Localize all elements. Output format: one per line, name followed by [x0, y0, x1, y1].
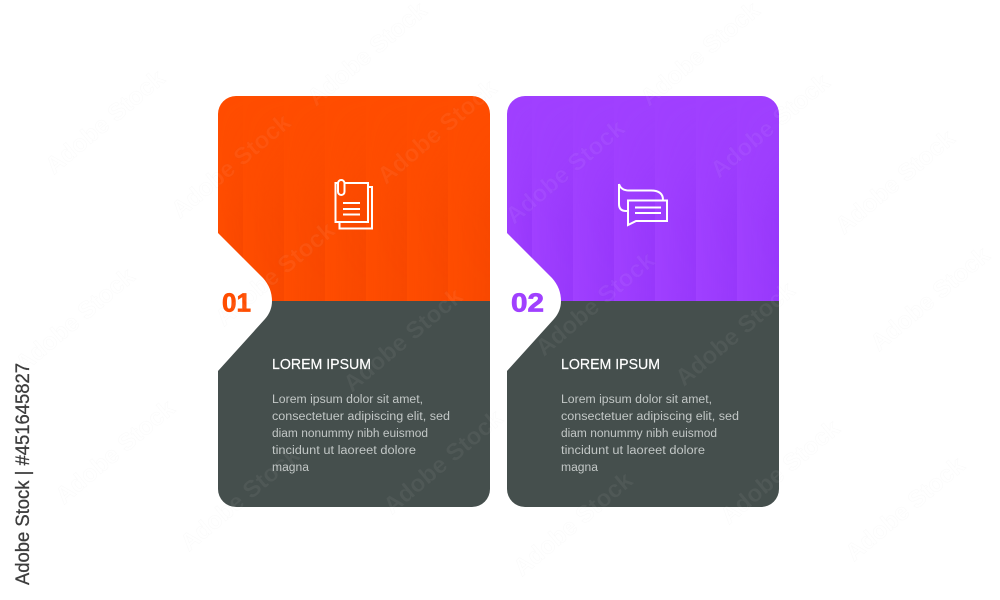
stock watermark pattern: Adobe Stock [210, 216, 341, 332]
stock watermark pattern: Adobe Stock [865, 241, 996, 357]
icon: speech bubbles [619, 184, 667, 225]
body text: consectetuer adipiscing elit, sed [561, 411, 739, 423]
stock watermark pattern: Adobe Stock [372, 74, 503, 190]
stock watermark pattern: Adobe Stock [830, 124, 961, 240]
heading: LOREM IPSUM [561, 357, 660, 373]
stock watermark pattern: Adobe Stock [530, 246, 661, 362]
stock watermark pattern: Adobe Stock [715, 414, 846, 530]
stock watermark pattern: Adobe Stock [338, 282, 469, 398]
orange top panel [218, 96, 490, 301]
panel: step 01 [218, 96, 490, 507]
dark bottom panel [218, 301, 490, 507]
stock watermark pattern: Adobe Stock [378, 404, 509, 520]
icon: documents with paperclip [336, 180, 372, 228]
stock watermark pattern: Adobe Stock [10, 262, 141, 378]
stock watermark pattern: Adobe Stock [302, 0, 433, 112]
stock watermark pattern: Adobe Stock [40, 64, 171, 180]
purple panel gradient stripes [518, 215, 779, 301]
orange panel gradient stripes [230, 245, 272, 298]
number 02: 02 [511, 288, 544, 318]
body text: Lorem ipsum dolor sit amet, [272, 394, 423, 406]
number 01: 01 [222, 288, 251, 318]
purple top panel [507, 96, 779, 301]
body text: Lorem ipsum dolor sit amet, [561, 394, 712, 406]
body text: consectetuer adipiscing elit, sed [272, 411, 450, 423]
heading: LOREM IPSUM [272, 357, 371, 373]
stock watermark pattern: Adobe Stock [175, 441, 306, 557]
stock watermark pattern: Adobe Stock [705, 68, 836, 184]
body text: diam nonummy nibh euismod [272, 428, 428, 440]
body text: magna [561, 462, 599, 474]
body text: diam nonummy nibh euismod [561, 428, 717, 440]
body text: tincidunt ut laoreet dolore [272, 445, 416, 457]
stock id caption: Adobe Stock | #451645827 [13, 363, 34, 585]
dark bottom panel [507, 301, 779, 507]
stock watermark pattern: Adobe Stock [166, 108, 297, 224]
body text: magna [272, 462, 310, 474]
stock watermark pattern: Adobe Stock [840, 451, 971, 567]
stock watermark pattern: Adobe Stock [635, 0, 766, 112]
body text [272, 394, 450, 474]
body text: tincidunt ut laoreet dolore [561, 445, 705, 457]
stock watermark pattern: Adobe Stock [670, 276, 801, 392]
panel: step 02 [507, 96, 779, 507]
stock watermark pattern: Adobe Stock [508, 466, 639, 582]
stock watermark pattern: Adobe Stock [50, 394, 181, 510]
stock watermark pattern: Adobe Stock [500, 114, 631, 230]
body text [561, 394, 739, 474]
